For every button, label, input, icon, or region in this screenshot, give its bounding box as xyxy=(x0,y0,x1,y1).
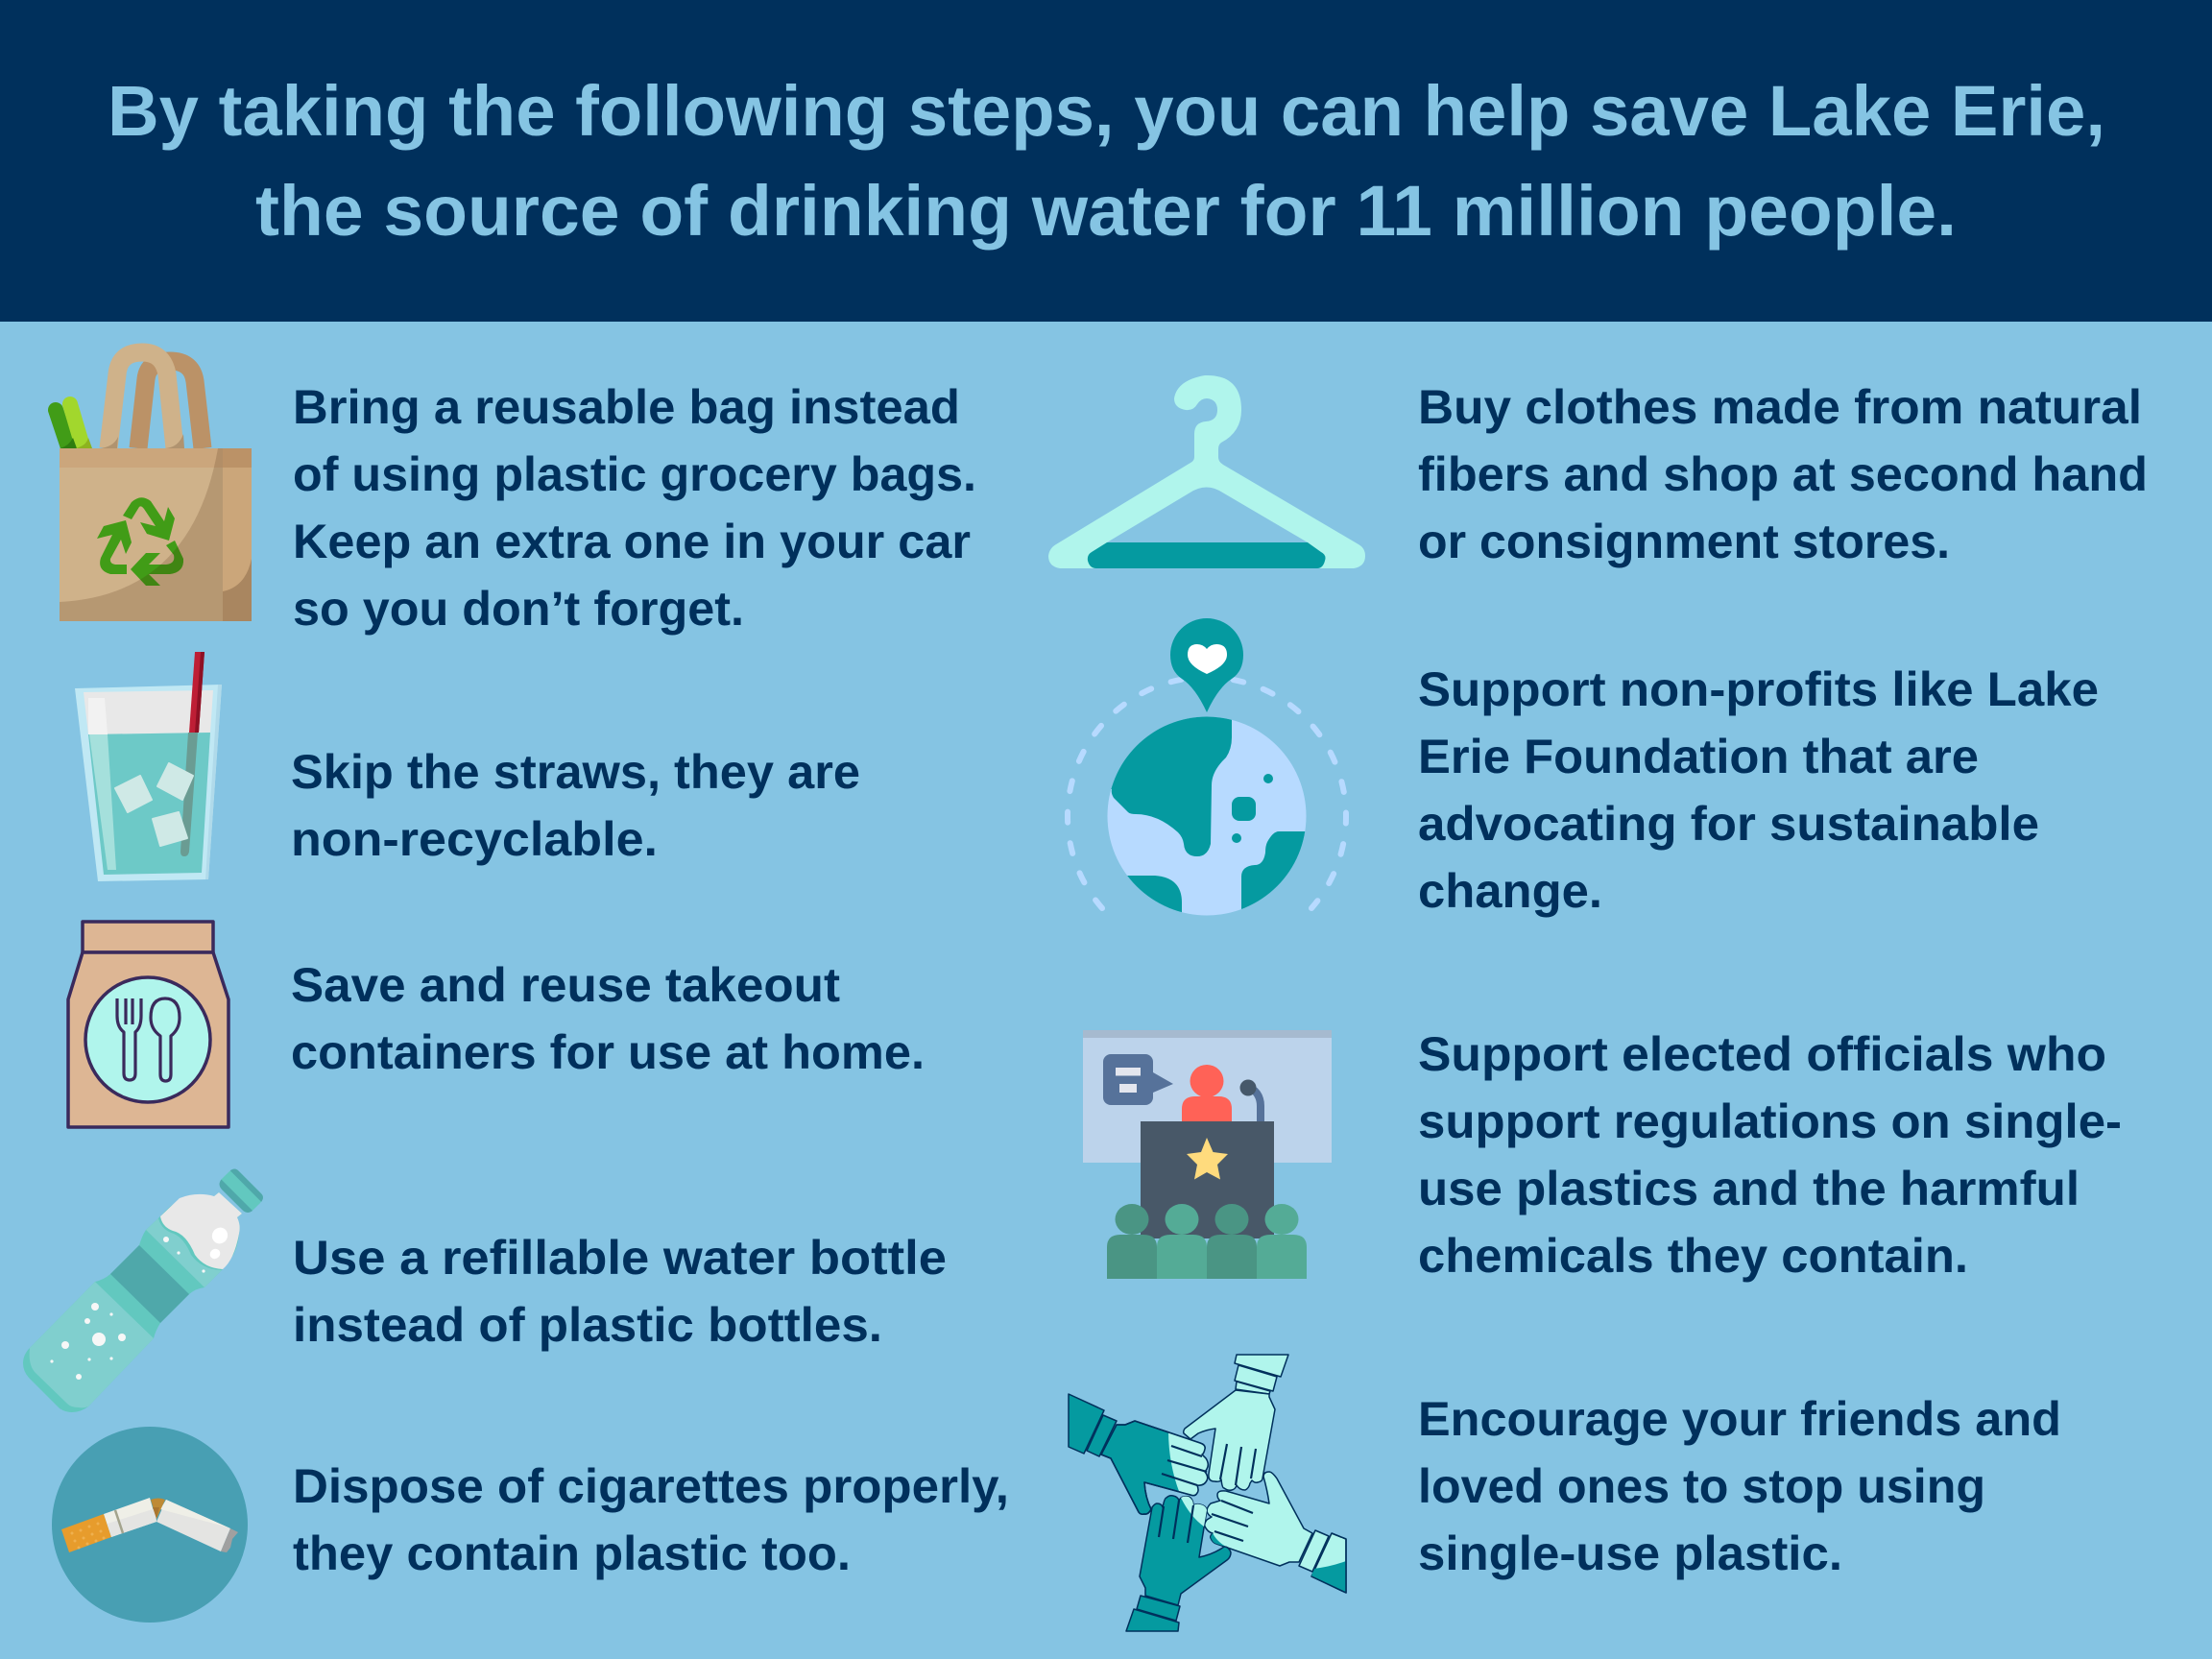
header panel xyxy=(0,0,2212,322)
text: clothes: Buy clothes made from natural xyxy=(1418,380,2142,434)
speech bubble xyxy=(1103,1054,1173,1105)
text: water bottle: Use a refillable water bottle xyxy=(293,1231,947,1285)
title xyxy=(108,71,2105,251)
text: elected officials xyxy=(1418,1027,2122,1283)
straw xyxy=(180,652,204,856)
text: encourage friends: single-use plastic. xyxy=(1418,1527,1842,1580)
speaker xyxy=(1182,1065,1232,1121)
spoon xyxy=(151,998,180,1081)
top hand xyxy=(1184,1355,1288,1490)
text: water bottle xyxy=(293,1231,947,1352)
text: elected officials: Support elected officials who xyxy=(1418,1027,2106,1081)
icon: clothes hanger xyxy=(1048,375,1365,568)
text: reusable bag: Bring a reusable bag instead xyxy=(293,380,960,434)
icon: reusable bag xyxy=(56,352,252,621)
text: encourage friends xyxy=(1418,1392,2061,1580)
recycling symbol xyxy=(97,497,183,586)
text: non-profits: Support non-profits like Lake xyxy=(1418,662,2099,716)
audience xyxy=(1107,1204,1307,1279)
bottle cap xyxy=(217,1166,265,1215)
text: encourage friends: Encourage your friends and xyxy=(1418,1392,2061,1446)
bubbles xyxy=(50,1237,205,1380)
location pin xyxy=(1170,618,1243,712)
title: By taking the following steps, you can help save Lake Erie, xyxy=(108,71,2105,151)
text: reusable bag xyxy=(293,380,976,636)
icon: globe with heart pin xyxy=(1068,618,1346,941)
icon: glass with straw xyxy=(75,652,222,881)
text: non-profits: change. xyxy=(1418,864,1602,918)
text: takeout containers: Save and reuse takeout xyxy=(291,958,840,1012)
icon: takeout bag xyxy=(68,922,228,1127)
icon: water bottle xyxy=(23,1166,265,1412)
text: takeout containers: containers for use at home. xyxy=(291,1025,925,1079)
text: clothes xyxy=(1418,380,2148,568)
text: elected officials: support regulations on single- xyxy=(1418,1094,2122,1148)
icon: podium and audience xyxy=(1083,1030,1332,1279)
text: non-profits: Erie Foundation that are xyxy=(1418,730,1979,783)
text: encourage friends: loved ones to stop using xyxy=(1418,1459,1985,1513)
text: elected officials: chemicals they contain. xyxy=(1418,1229,1968,1283)
text: non-profits: advocating for sustainable xyxy=(1418,797,2039,851)
left hand xyxy=(1069,1394,1219,1514)
text: takeout containers xyxy=(291,958,925,1079)
text: cigarettes: Dispose of cigarettes properly, xyxy=(293,1459,1009,1513)
text: clothes: fibers and shop at second hand xyxy=(1418,447,2148,501)
text: straws: non-recyclable. xyxy=(291,812,658,866)
fork xyxy=(117,998,141,1080)
right hand xyxy=(1205,1472,1346,1593)
text: cigarettes: they contain plastic too. xyxy=(293,1527,851,1580)
text: water bottle: instead of plastic bottles. xyxy=(293,1298,882,1352)
text: cigarettes xyxy=(293,1459,1009,1580)
text: clothes: or consignment stores. xyxy=(1418,515,1950,568)
text: reusable bag: so you don’t forget. xyxy=(293,582,744,636)
bottom hand xyxy=(1126,1496,1231,1631)
title: the source of drinking water for 11 million people. xyxy=(255,171,1957,251)
icon: broken cigarette xyxy=(52,1427,248,1623)
text: non-profits xyxy=(1418,662,2099,918)
text: elected officials: use plastics and the harmful xyxy=(1418,1162,2080,1215)
text: straws xyxy=(291,745,860,866)
text: reusable bag: Keep an extra one in your car xyxy=(293,515,971,568)
text: straws: Skip the straws, they are xyxy=(291,745,860,799)
ice cubes xyxy=(115,763,193,846)
text: reusable bag: of using plastic grocery bags. xyxy=(293,447,976,501)
icon: joined hands xyxy=(1069,1355,1346,1631)
